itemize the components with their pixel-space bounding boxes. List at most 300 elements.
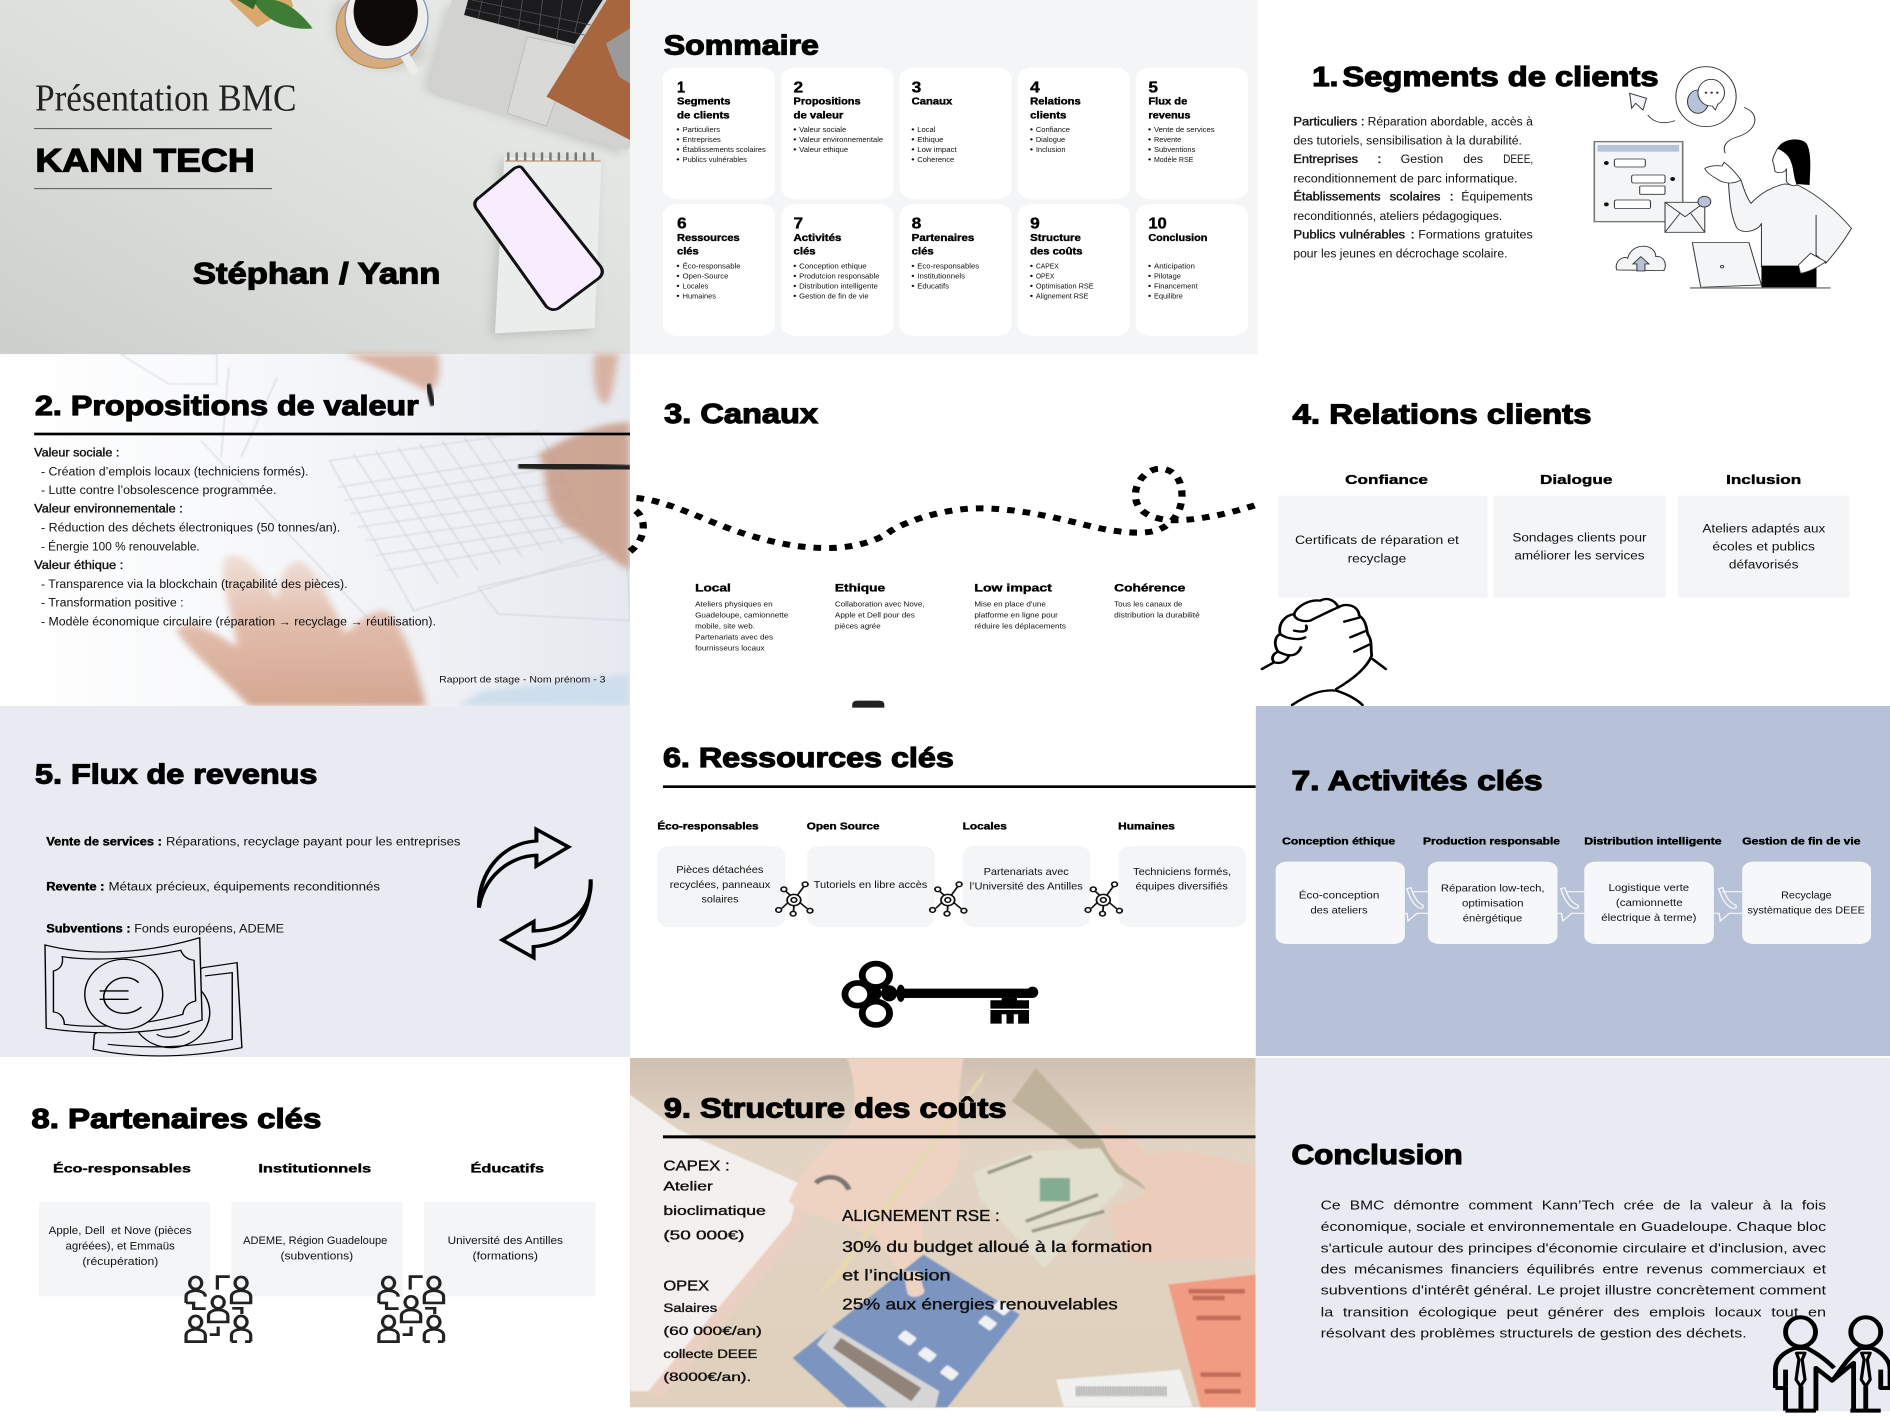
card 8: Institutionnels xyxy=(917,271,965,280)
icon: circular arrows xyxy=(479,829,591,958)
card 5: Revente xyxy=(1154,135,1182,144)
card 8: Eco-responsables xyxy=(917,261,979,270)
column: Open Source xyxy=(807,821,935,927)
card 9: • xyxy=(1030,261,1033,270)
column: Inclusion: écoles et publics xyxy=(1712,540,1815,553)
text block: customer segments xyxy=(1293,114,1533,260)
card 9: Structure xyxy=(1030,233,1081,244)
heading: 7. Activités clés: 7. Activités clés xyxy=(1291,766,1543,796)
column: Dialogue xyxy=(1493,473,1666,598)
card 3: • xyxy=(911,155,915,164)
text block: conclusion paragraph: résolvant des problèmes structurels de gestion des déchets. xyxy=(1321,1326,1747,1340)
card 2 xyxy=(781,67,894,199)
card 7: • xyxy=(793,281,797,290)
step: Distribution intelligente: électrique à terme) xyxy=(1601,913,1697,924)
column: Ethique: Apple et Dell pour des xyxy=(835,610,915,619)
text block: customer segments: Réparation abordable, accès à xyxy=(1368,114,1533,128)
card 5: • xyxy=(1148,155,1151,164)
icon: network 2 xyxy=(930,882,967,916)
card 8: • xyxy=(911,281,915,290)
column: Ethique: Ethique xyxy=(835,581,885,594)
column: Éco-responsables xyxy=(657,820,785,927)
column: Cohérence: Tous les canaux de xyxy=(1114,599,1183,608)
card 7: • xyxy=(793,271,797,280)
card 4: Dialogue xyxy=(1036,135,1065,144)
card 9: Optimisation RSE xyxy=(1036,281,1094,290)
text block: revenue streams: Revente : xyxy=(46,879,104,893)
column: Ethique: pièces agrée xyxy=(835,621,881,630)
column: Low impact: platforme en ligne pour xyxy=(974,610,1058,619)
text block: OPEX: Salaires xyxy=(663,1301,718,1315)
column: Open Source: Open Source xyxy=(807,821,880,832)
step: Production responsable: Production responsable xyxy=(1423,837,1560,847)
text block: OPEX: (60 000€/an) xyxy=(663,1324,762,1338)
card 2: 2 xyxy=(794,78,803,96)
text block: CAPEX: CAPEX : xyxy=(663,1158,730,1174)
card 10: • xyxy=(1148,271,1151,280)
card 10: • xyxy=(1148,281,1151,290)
text block: conclusion paragraph: des mécanismes financiers équilibrés entre revenus commerciaux et xyxy=(1321,1262,1826,1276)
card 7: Distribution intelligente xyxy=(799,281,878,290)
text block: revenue streams xyxy=(46,834,460,935)
text block: value propositions: - Transformation positive : xyxy=(41,596,184,609)
panel: 1. segments de clients xyxy=(1260,0,1890,354)
text block: value propositions: - Création d’emplois locaux (techniciens formés). xyxy=(41,464,309,478)
text block: alignement RSE: 25% aux énergies renouvelables xyxy=(842,1296,1118,1313)
card 9 xyxy=(1018,204,1130,336)
column: Éco-responsables xyxy=(39,1161,210,1296)
card 7 xyxy=(781,204,894,336)
icon: network 3 xyxy=(1085,882,1122,916)
card 8: clés xyxy=(912,247,934,257)
column: Institutionnels: (subventions) xyxy=(280,1249,353,1262)
text block: value propositions: Valeur éthique : xyxy=(34,558,123,572)
text block: revenue streams: Vente de services : xyxy=(46,834,162,848)
step: Distribution intelligente: Logistique verte xyxy=(1609,883,1689,894)
step: Production responsable: énèrgétique xyxy=(1463,913,1522,924)
card 7: • xyxy=(793,291,797,300)
text block: CAPEX: bioclimatique xyxy=(663,1203,766,1218)
card 2: Valeur ethique xyxy=(799,145,848,154)
heading: 9. Structure des coûts: 9. Structure des coûts xyxy=(664,1094,1006,1124)
text block: value propositions: - Modèle économique circulaire (réparation → recyclage → réutilisation). xyxy=(41,614,436,628)
card 5: • xyxy=(1148,145,1151,154)
card 6: Open-Source xyxy=(683,271,729,280)
column: Éco-responsables: (récupération) xyxy=(82,1255,158,1268)
text block: OPEX: OPEX xyxy=(663,1278,709,1294)
heading: 2. Propositions de valeur: 2. Propositions de valeur xyxy=(35,392,419,421)
text block: alignement RSE: et l’inclusion xyxy=(842,1267,951,1284)
card 8: 8 xyxy=(912,214,921,232)
icon: key xyxy=(845,964,1038,1025)
column: Locales xyxy=(963,821,1090,927)
column: Low impact: Mise en place d'une xyxy=(974,599,1046,608)
text block: alignement RSE: ALIGNEMENT RSE : xyxy=(842,1207,1000,1225)
text block: value propositions: - Énergie 100 % renouvelable. xyxy=(41,539,200,553)
text block: CAPEX xyxy=(663,1158,766,1242)
card 5: • xyxy=(1148,125,1151,134)
card 9: • xyxy=(1030,271,1033,280)
text block: customer segments: pour les jeunes en décrochage scolaire. xyxy=(1293,247,1508,260)
card 3: Ethique xyxy=(917,135,944,144)
column: Inclusion: défavorisés xyxy=(1729,558,1799,571)
panel: sommaire xyxy=(630,0,1258,354)
column: Éco-responsables: Apple, Dell et Nove (pièces xyxy=(49,1224,192,1237)
card 1: • xyxy=(676,135,680,144)
card 2: • xyxy=(793,145,797,154)
panel: 5. flux de revenus xyxy=(0,706,630,1057)
card 5: 5 xyxy=(1148,78,1158,96)
card 10: • xyxy=(1148,261,1151,270)
column: Confiance: Confiance xyxy=(1345,473,1428,488)
heading: 4. Relations clients: 4. Relations clients xyxy=(1293,400,1591,430)
card 6: • xyxy=(676,281,680,290)
column: Éducatifs: (formations) xyxy=(473,1249,538,1262)
panel: 7. activités clés xyxy=(1256,706,1890,1056)
text block: CAPEX: (50 000€) xyxy=(663,1228,745,1242)
text block: customer segments: Publics xyxy=(1293,228,1336,241)
panel: 9. structure des coûts xyxy=(630,1058,1256,1407)
card 8 xyxy=(900,204,1012,336)
card 3: • xyxy=(911,125,915,134)
dashed path xyxy=(629,469,1257,551)
photo: hands over blueprint xyxy=(121,354,630,706)
card 4: clients xyxy=(1030,110,1066,121)
step: Distribution intelligente xyxy=(1584,837,1722,944)
card 7: Gestion de fin de vie xyxy=(799,291,869,300)
text block: revenue streams: Subventions : xyxy=(46,922,131,935)
card 3 xyxy=(900,67,1012,199)
column: Éducatifs: Université des Antilles xyxy=(448,1234,563,1247)
title: KANN TECH: KANN TECH xyxy=(35,142,255,179)
card 1: Entreprises xyxy=(683,135,721,144)
card 9: • xyxy=(1030,291,1033,300)
heading: 1. Segments de clients: 1. xyxy=(1312,63,1338,92)
text block: value propositions: Valeur sociale : xyxy=(34,445,119,459)
column: Humaines: Techniciens formés, xyxy=(1133,867,1231,878)
card 10: • xyxy=(1148,291,1151,300)
card 5: Subventions xyxy=(1154,145,1195,154)
text block: alignement RSE: 30% du budget alloué à la formation xyxy=(842,1238,1152,1256)
title: Présentation BMC: Présentation BMC xyxy=(35,78,297,120)
step: Production responsable: optimisation xyxy=(1462,898,1524,909)
text block: customer segments: vulnérables xyxy=(1340,228,1405,241)
text block: customer segments: Établissements xyxy=(1293,190,1381,203)
text block: CAPEX: Atelier xyxy=(663,1179,713,1193)
column: Local: Guadeloupe, camionnette xyxy=(695,610,789,619)
icon: clasped hands xyxy=(1262,599,1386,705)
step: Distribution intelligente: Distribution intelligente xyxy=(1584,837,1722,847)
text block: conclusion paragraph xyxy=(1321,1198,1826,1340)
column: Humaines: Humaines xyxy=(1118,821,1175,832)
card 1: de clients xyxy=(677,110,730,121)
column: Éco-responsables: Éco-responsables xyxy=(53,1161,191,1175)
column: Éco-responsables: solaires xyxy=(702,895,739,905)
column: Local: Ateliers physiques en xyxy=(695,599,773,608)
column: Inclusion: Inclusion xyxy=(1726,473,1801,488)
card 8: • xyxy=(911,271,915,280)
text block: customer segments: Entreprises xyxy=(1293,152,1358,166)
card 3: Canaux xyxy=(912,97,952,107)
column: Inclusion xyxy=(1678,473,1849,598)
column: Institutionnels xyxy=(231,1161,403,1296)
column: Local xyxy=(695,581,789,652)
card 6 xyxy=(663,204,775,336)
card 10: Conclusion xyxy=(1148,233,1207,244)
column: Éducatifs xyxy=(424,1161,595,1296)
card 1: • xyxy=(676,145,680,154)
column: Humaines: équipes diversifiés xyxy=(1135,882,1228,892)
card 5: Flux de xyxy=(1148,97,1187,107)
panel: 8. partenaires clés xyxy=(0,1058,627,1417)
column: Low impact xyxy=(974,581,1066,630)
card 5 xyxy=(1136,67,1248,199)
text block: value propositions: - Réduction des déchets électroniques (50 tonnes/an). xyxy=(41,521,340,534)
card 9: des coûts xyxy=(1030,247,1082,257)
column: Low impact: Low impact xyxy=(974,581,1052,594)
column: Cohérence: distribution la durabilité xyxy=(1114,610,1200,619)
text block: conclusion paragraph: s'articule autour des principes d'économie circulaire et d'inclusion, avec xyxy=(1321,1241,1826,1255)
card 6: • xyxy=(676,291,680,300)
column: Éco-responsables: recyclées, panneaux xyxy=(670,880,770,891)
text block: customer segments: des xyxy=(1463,152,1483,166)
column: Locales: Locales xyxy=(963,821,1007,832)
card 10: Equilibre xyxy=(1154,291,1183,300)
column: Institutionnels: Institutionnels xyxy=(258,1161,371,1175)
card 2: Valeur sociale xyxy=(799,125,846,134)
text block: conclusion paragraph: économique, sociale et environnementale en Guadeloupe. Chaque bloc xyxy=(1321,1219,1826,1234)
text block: customer segments: Particuliers : xyxy=(1293,114,1364,128)
text block: customer segments: Équipements xyxy=(1461,190,1533,203)
text block: customer segments: : xyxy=(1450,190,1454,203)
column: Locales: l’Université des Antilles xyxy=(970,881,1083,892)
card 4: Relations xyxy=(1030,97,1081,107)
text block: conclusion paragraph: subventions d'intérêt général. Le projet illustre concrètement comment xyxy=(1321,1283,1826,1297)
column: Humaines xyxy=(1118,821,1246,927)
authors: Stéphan / Yann xyxy=(193,257,440,291)
text block: customer segments: Gestion xyxy=(1401,152,1443,166)
photo: desk objects xyxy=(229,0,630,336)
card 3: • xyxy=(911,135,915,144)
step: Conception éthique: Éco-conception xyxy=(1299,890,1379,901)
text block: value propositions xyxy=(34,445,436,628)
connector icons xyxy=(1405,888,1742,921)
heading: 5. Flux de revenus: 5. Flux de revenus xyxy=(35,760,317,790)
card 7: • xyxy=(793,261,797,270)
card 1: Particuliers xyxy=(683,125,720,134)
column: Locales: Partenariats avec xyxy=(984,867,1069,878)
card 2: • xyxy=(793,125,797,134)
column: Ethique: Collaboration avec Nove, xyxy=(835,599,925,608)
text block: revenue streams: Fonds européens, ADEME xyxy=(134,922,284,935)
column: Éco-responsables: Éco-responsables xyxy=(657,820,759,832)
column: Open Source: Tutoriels en libre accès xyxy=(814,880,928,891)
text block: OPEX xyxy=(663,1278,762,1384)
heading: 6. Ressources clés: 6. Ressources clés xyxy=(663,744,954,773)
card 3: Local xyxy=(917,125,935,134)
step: Gestion de fin de vie: systèmatique des DEEE xyxy=(1747,906,1865,916)
icon: network 1 xyxy=(776,882,813,916)
card 10: 10 xyxy=(1148,214,1167,232)
heading: 1. Segments de clients: Segments de clients xyxy=(1342,63,1659,92)
card 4: • xyxy=(1030,125,1033,134)
card 6: • xyxy=(676,271,680,280)
card 8: Educatifs xyxy=(917,281,949,290)
card 7: Activités xyxy=(794,233,841,244)
card 6: Ressources xyxy=(677,233,740,244)
icon: cropped device xyxy=(852,701,884,709)
panel: 3. canaux xyxy=(629,354,1258,709)
icon: people network 1 xyxy=(186,1277,251,1342)
card 8: Partenaires xyxy=(912,233,974,244)
column: Cohérence: Cohérence xyxy=(1114,581,1186,594)
column: Local: mobile, site web. xyxy=(695,621,755,630)
card 3: 3 xyxy=(912,78,921,96)
text block: customer segments: : xyxy=(1377,152,1381,166)
card 6: Éco-responsable xyxy=(683,261,741,270)
card 6: Locales xyxy=(683,281,708,290)
column: Confiance: recyclage xyxy=(1348,551,1406,565)
card 9: CAPEX xyxy=(1036,261,1059,270)
card 10: Anticipation xyxy=(1154,261,1195,270)
text block: value propositions: - Lutte contre l’obsolescence programmée. xyxy=(41,483,276,497)
heading: Conclusion: Conclusion xyxy=(1291,1140,1463,1170)
step: Conception éthique: des ateliers xyxy=(1310,906,1368,916)
card 6: • xyxy=(676,261,680,270)
footer note: Rapport de stage - Nom prénom - 3 xyxy=(439,675,606,685)
panel: conclusion xyxy=(1256,1058,1890,1411)
card 7: Produtcion responsable xyxy=(799,271,880,280)
card 1: • xyxy=(676,125,680,134)
card 6: clés xyxy=(677,247,699,257)
card 7: clés xyxy=(794,247,816,257)
step: Conception éthique xyxy=(1276,837,1405,944)
illustration: woman with chat, window, envelope and laptop xyxy=(1594,67,1851,288)
column: Dialogue: Dialogue xyxy=(1540,473,1612,488)
text block: revenue streams: Réparations, recyclage payant pour les entreprises xyxy=(166,834,460,848)
card 1 xyxy=(663,67,775,199)
heading: 8. Partenaires clés: 8. Partenaires clés xyxy=(31,1105,321,1134)
card 4: • xyxy=(1030,145,1033,154)
text block: customer segments: Formations xyxy=(1418,228,1481,241)
column: Low impact: réduire les déplacements xyxy=(974,621,1066,630)
card 5: • xyxy=(1148,135,1151,144)
card 3: Low impact xyxy=(917,145,957,154)
icon: people network 2 xyxy=(379,1277,444,1342)
card 4: 4 xyxy=(1030,78,1040,96)
card 7: 7 xyxy=(794,214,803,232)
card 1: Publics vulnérables xyxy=(683,155,747,164)
text block: value propositions: Valeur environnementale : xyxy=(34,502,183,515)
text block: customer segments: scolaires xyxy=(1390,190,1441,203)
text block: customer segments: DEEE, xyxy=(1503,152,1533,166)
card 2: Propositions xyxy=(794,97,861,107)
icon: two businessmen holding hands xyxy=(1775,1317,1890,1411)
step: Conception éthique: Conception éthique xyxy=(1282,837,1395,847)
card 6: Humaines xyxy=(683,291,716,300)
card 5: Modèle RSE xyxy=(1154,155,1194,164)
card 8: • xyxy=(911,261,915,270)
text block: alignement RSE xyxy=(842,1207,1152,1313)
card 4: Confiance xyxy=(1036,125,1070,134)
text block: OPEX: (8000€/an). xyxy=(663,1370,751,1384)
text block: conclusion paragraph: la transition écologique peut générer des emplois locaux tout en xyxy=(1321,1305,1826,1319)
card 5: revenus xyxy=(1148,110,1191,121)
column: Éco-responsables: agréées), et Emmaüs xyxy=(65,1240,175,1252)
card 3: • xyxy=(911,145,915,154)
card 4 xyxy=(1018,67,1130,199)
text block: customer segments: reconditionnés, ateliers pédagogiques. xyxy=(1293,209,1502,223)
column: Institutionnels: ADEME, Région Guadeloupe xyxy=(243,1234,388,1247)
card 10: Pilotage xyxy=(1154,271,1181,280)
step: Gestion de fin de vie xyxy=(1742,837,1871,944)
text block: conclusion paragraph: Ce BMC démontre comment Kann’Tech crée de la valeur à la fois xyxy=(1321,1198,1826,1212)
panel: 6. ressources clés xyxy=(630,708,1256,1057)
card 2: • xyxy=(793,135,797,144)
card 4: Inclusion xyxy=(1036,145,1066,154)
card 1: 1 xyxy=(677,78,685,96)
column: Éco-responsables: Pièces détachées xyxy=(676,865,764,876)
card 1: • xyxy=(676,155,680,164)
panel: title slide xyxy=(0,0,630,354)
icon: euro banknotes xyxy=(45,938,242,1056)
step: Production responsable: Réparation low-tech, xyxy=(1441,883,1545,894)
card 3: Coherence xyxy=(917,155,954,164)
column: Local: Local xyxy=(695,581,731,594)
text block: customer segments: gratuites xyxy=(1485,228,1533,241)
column: Dialogue: Sondages clients pour xyxy=(1512,531,1647,544)
column: Dialogue: améliorer les services xyxy=(1514,549,1645,562)
card 10: Financement xyxy=(1154,281,1198,290)
step: Gestion de fin de vie: Recyclage xyxy=(1781,891,1832,901)
step: Production responsable xyxy=(1423,837,1560,944)
card 2: de valeur xyxy=(794,110,843,121)
column: Confiance: Certificats de réparation et xyxy=(1295,533,1459,547)
card 9: OPEX xyxy=(1036,271,1055,280)
column: Local: Partenariats avec des xyxy=(695,632,773,641)
card 10 xyxy=(1136,204,1248,336)
card 5: Vente de services xyxy=(1154,125,1215,134)
column: Inclusion: Ateliers adaptés aux xyxy=(1702,522,1826,535)
photo: calculator, money and hands xyxy=(630,1058,1256,1407)
card 9: • xyxy=(1030,281,1033,290)
text block: revenue streams: Métaux précieux, équipements reconditionnés xyxy=(108,879,380,893)
column: Local: fournisseurs locaux xyxy=(695,643,765,652)
heading: Sommaire: Sommaire xyxy=(664,31,819,61)
card 9: Alignement RSE xyxy=(1036,291,1089,300)
column: Ethique xyxy=(835,581,925,630)
step: Gestion de fin de vie: Gestion de fin de vie xyxy=(1742,837,1860,847)
panel: 4. relations clients xyxy=(1260,354,1890,705)
panel: 2. propositions de valeur xyxy=(0,354,630,706)
text block: customer segments: des tutoriels, sensibilisation à la durabilité. xyxy=(1293,133,1522,147)
text block: customer segments: : xyxy=(1411,228,1415,241)
heading: 3. Canaux: 3. Canaux xyxy=(664,400,818,429)
column: Confiance xyxy=(1278,473,1487,598)
card 2: Valeur environnementale xyxy=(799,135,883,144)
step: Distribution intelligente: (camionnette xyxy=(1616,898,1683,909)
text block: customer segments: reconditionnement de parc informatique. xyxy=(1293,171,1518,185)
column: Cohérence xyxy=(1114,581,1200,619)
card 1: Établissements scolaires xyxy=(683,145,766,154)
card 1: Segments xyxy=(677,97,730,107)
column: Éducatifs: Éducatifs xyxy=(471,1161,544,1175)
card 9: 9 xyxy=(1030,214,1040,232)
text block: value propositions: - Transparence via la blockchain (traçabilité des pièces). xyxy=(41,577,348,591)
text block: OPEX: collecte DEEE xyxy=(663,1347,758,1361)
card 6: 6 xyxy=(677,214,687,232)
card 7: Conception ethique xyxy=(799,261,867,270)
